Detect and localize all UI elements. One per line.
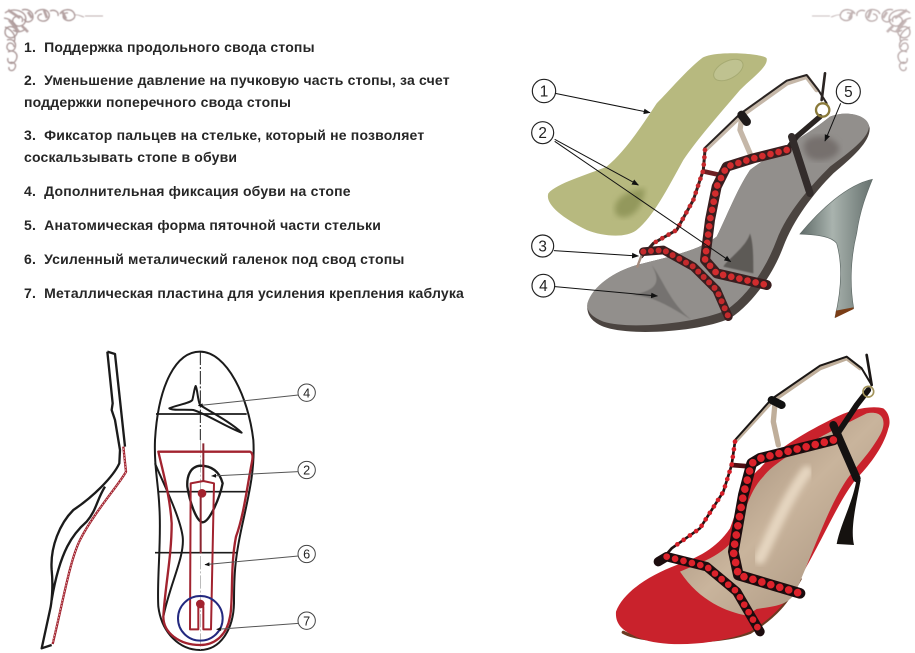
callout 5: 5 [844,84,853,101]
item 7: 7. Металлическая пластина для усиления крепления каблука [24,285,464,301]
item 4: 4. Дополнительная фиксация обуви на стопе [24,183,351,199]
red suede sole [616,407,890,644]
callout 2: 2 [303,464,310,478]
callout 5 [825,80,860,141]
black stiletto heel [837,478,861,545]
photo: red sandal [616,355,890,644]
sandal: straps with beads [637,73,829,317]
top view: arch pad [187,466,223,522]
technical drawing of insole [42,352,315,650]
top view: red insole reinforcement [158,452,253,645]
brown outsole edge [623,579,800,641]
corner ornament: top right [812,9,911,71]
straps with rhinestones [658,355,874,632]
callout 4: 4 [539,278,548,295]
item 1: 1. Поддержка продольного свода стопы [24,39,315,55]
callout 3: 3 [538,238,547,255]
insole highlight [760,472,807,558]
top view: metatarsal pad shape [169,386,242,433]
callout 3 [532,235,638,257]
callout 4: 4 [303,386,310,400]
callout 4 [532,274,657,297]
callout 2 [532,122,731,262]
callout 1: 1 [540,83,548,100]
callout 6 [205,545,315,565]
callout 7 [217,612,315,629]
sandal: grey sole [587,114,870,332]
text list: features of the insole [24,39,464,301]
callout 6: 6 [303,548,310,562]
top view: insole outline and axes [155,352,254,650]
item 3: 3. Фиксатор пальцев на стельке, который не позволяет соскальзывать стопе в обуви [24,127,424,165]
top view: metal shank plate [190,443,214,629]
heel: grey stiletto [800,179,872,318]
item 6: 6. Усиленный металический галенок под свод стопы [24,251,404,267]
item 5: 5. Анатомическая форма пяточной части стельки [24,217,381,233]
item 2: 2. Уменьшение давление на пучковую часть стопы, за счет поддержки поперечного свода стопы [24,72,450,110]
callout 1 [532,79,650,113]
callout 2: 2 [538,125,547,142]
insole: green arch support [548,53,767,236]
callout 7: 7 [303,614,310,628]
top view: blue heel plate circle [178,596,223,641]
corner ornament: top left [4,9,103,71]
callout 2 [212,461,315,479]
side profile view [42,352,126,648]
annotated exploded sandal diagram [532,53,872,332]
beige insole [680,413,884,616]
callout 4 [198,384,315,406]
